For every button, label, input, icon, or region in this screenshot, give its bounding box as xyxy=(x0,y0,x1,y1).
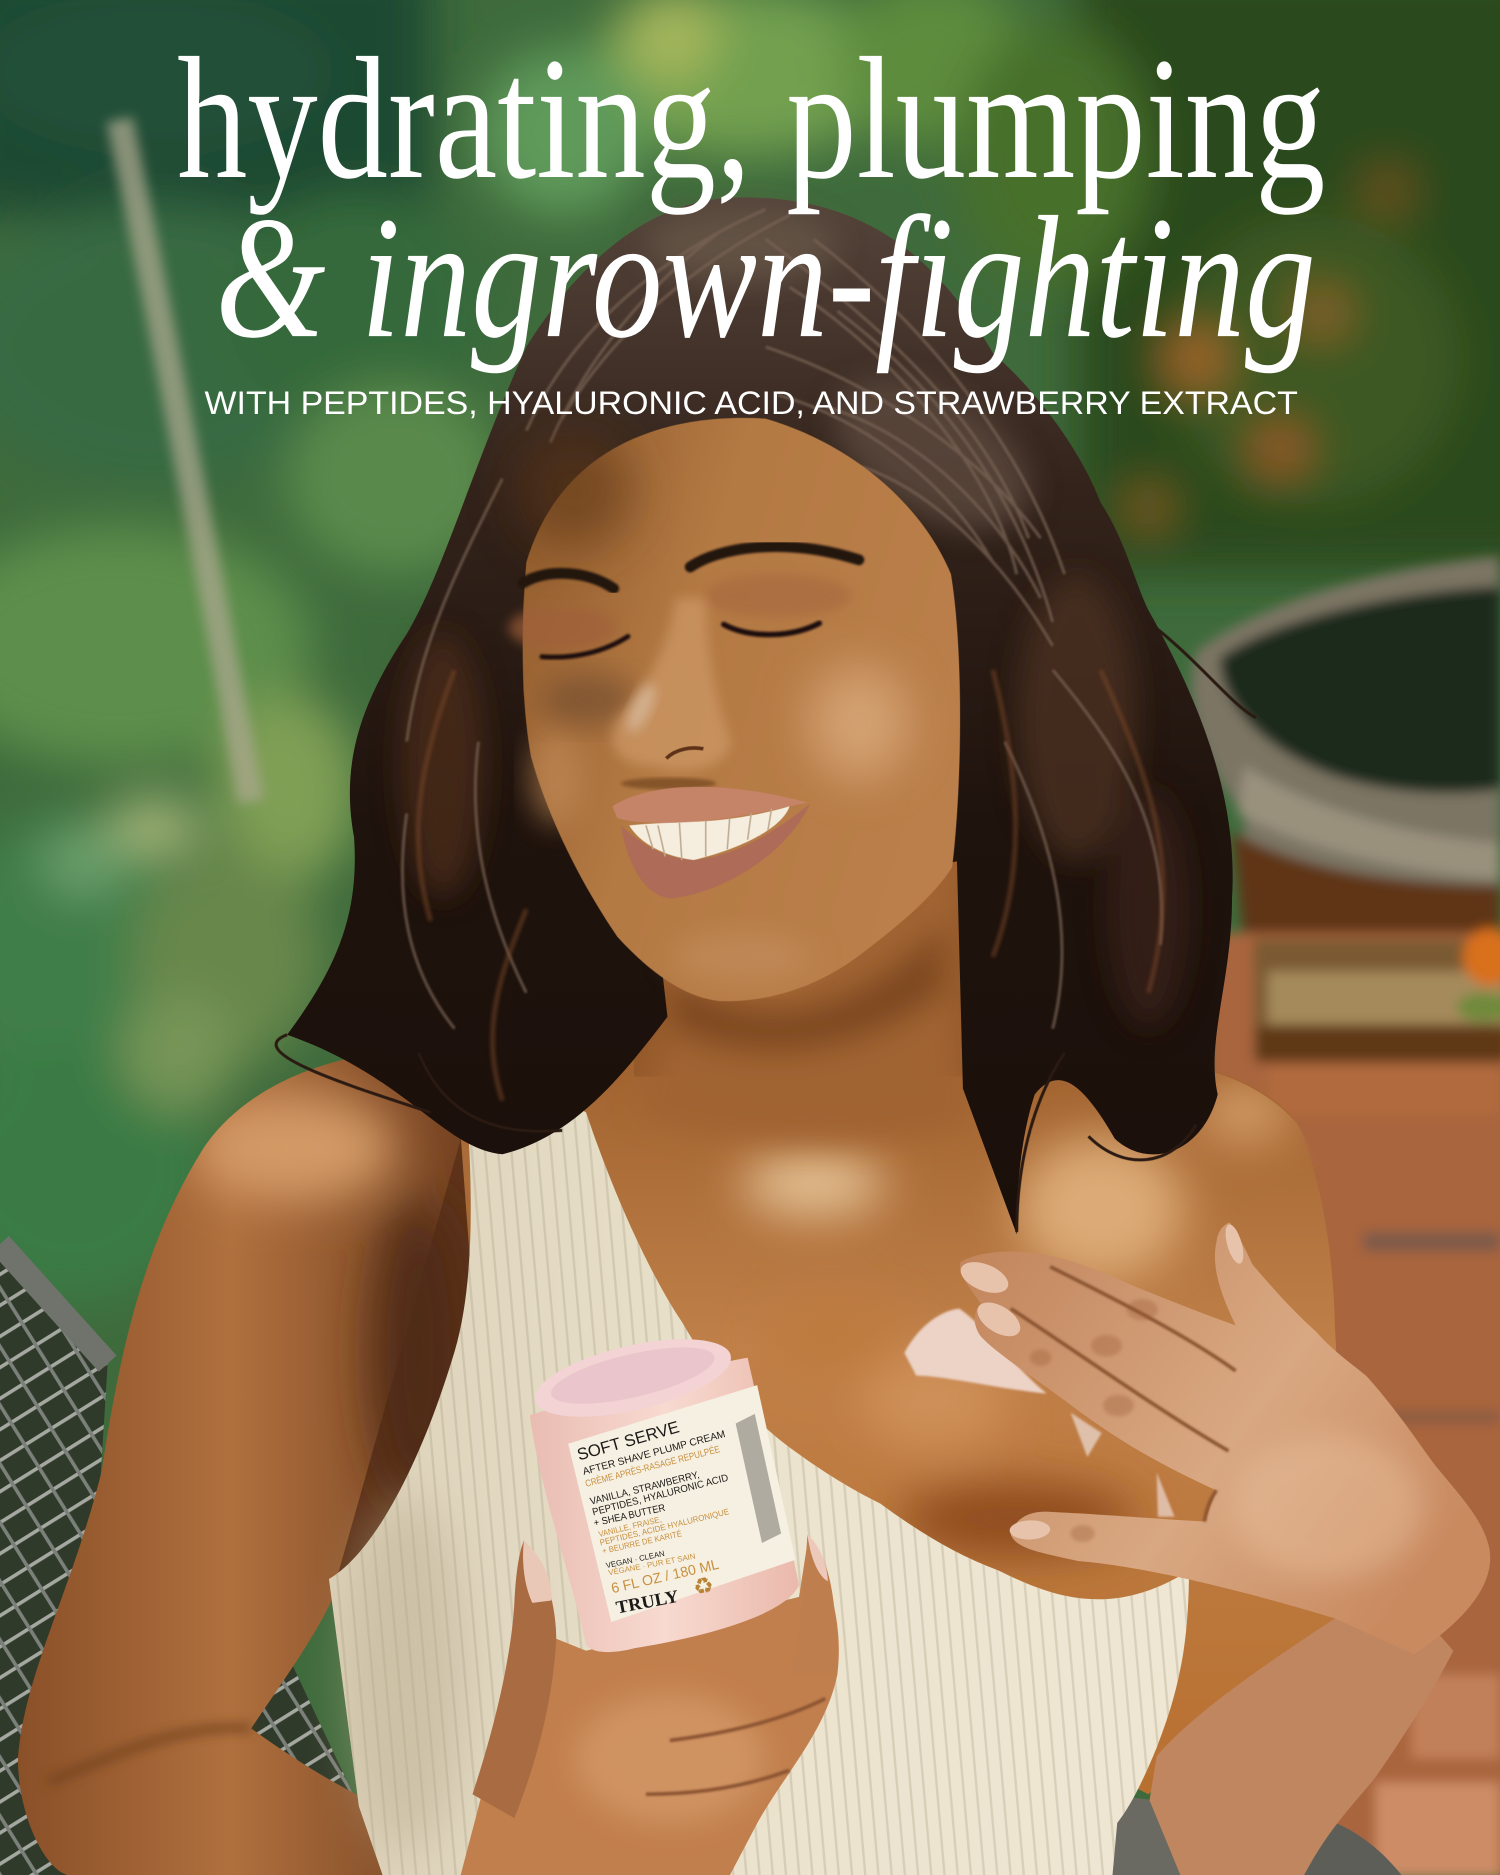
label text: + SHEA BUTTER xyxy=(593,1503,666,1529)
label text: VANILLE, FRAISE, xyxy=(597,1514,663,1539)
hair xyxy=(276,197,1256,1234)
tree trunk xyxy=(120,120,251,801)
nose xyxy=(612,598,731,789)
wicker chair xyxy=(0,1244,1402,1875)
hand holding jar xyxy=(461,1543,839,1875)
label fine print xyxy=(736,1414,781,1543)
label text: TRULY xyxy=(614,1586,680,1618)
jar label xyxy=(568,1385,795,1622)
eyebrows xyxy=(524,546,859,589)
label text xyxy=(575,1417,730,1618)
label text: AFTER SHAVE PLUMP CREAM xyxy=(582,1429,727,1478)
label text: + BEURRE DE KARITÉ xyxy=(601,1528,683,1556)
face xyxy=(508,418,960,1001)
jar body xyxy=(530,1358,799,1652)
neck xyxy=(634,837,981,1141)
label text: SOFT SERVE xyxy=(575,1417,681,1464)
label text: VANILLA, STRAWBERRY, xyxy=(589,1470,701,1508)
label text: VEGAN · CLEAN xyxy=(605,1549,665,1570)
smile xyxy=(612,787,810,898)
right side deck and tub xyxy=(1192,556,1500,1875)
label text: PEPTIDES, ACIDE HYALURONIQUE xyxy=(599,1506,730,1547)
headline xyxy=(177,21,1325,374)
lower right arm xyxy=(1150,1603,1453,1875)
subheading: WITH PEPTIDES, HYALURONIC ACID, AND STRAWBERRY EXTRACT xyxy=(205,385,1298,421)
label text: PEPTIDES, HYALURONIC ACID xyxy=(591,1473,730,1518)
label text: 6 FL OZ / 180 ML xyxy=(610,1557,721,1597)
closed eyes xyxy=(542,623,819,657)
cream swipe on chest xyxy=(904,1309,1175,1517)
tank top xyxy=(329,1103,1189,1875)
jar lid rim xyxy=(528,1324,738,1432)
nails xyxy=(956,1222,1247,1540)
finger separations and knuckles xyxy=(1011,1267,1236,1522)
product jar xyxy=(528,1324,799,1652)
arms and torso skin xyxy=(18,1050,1453,1875)
fingers over jar xyxy=(472,1535,837,1818)
hand on chest xyxy=(956,1222,1490,1654)
label text: CRÈME APRÈS-RASAGE REPULPÉE xyxy=(584,1444,721,1490)
label text: VÉGANE · PUR ET SAIN xyxy=(608,1552,696,1577)
label text: ♻ xyxy=(691,1572,716,1602)
